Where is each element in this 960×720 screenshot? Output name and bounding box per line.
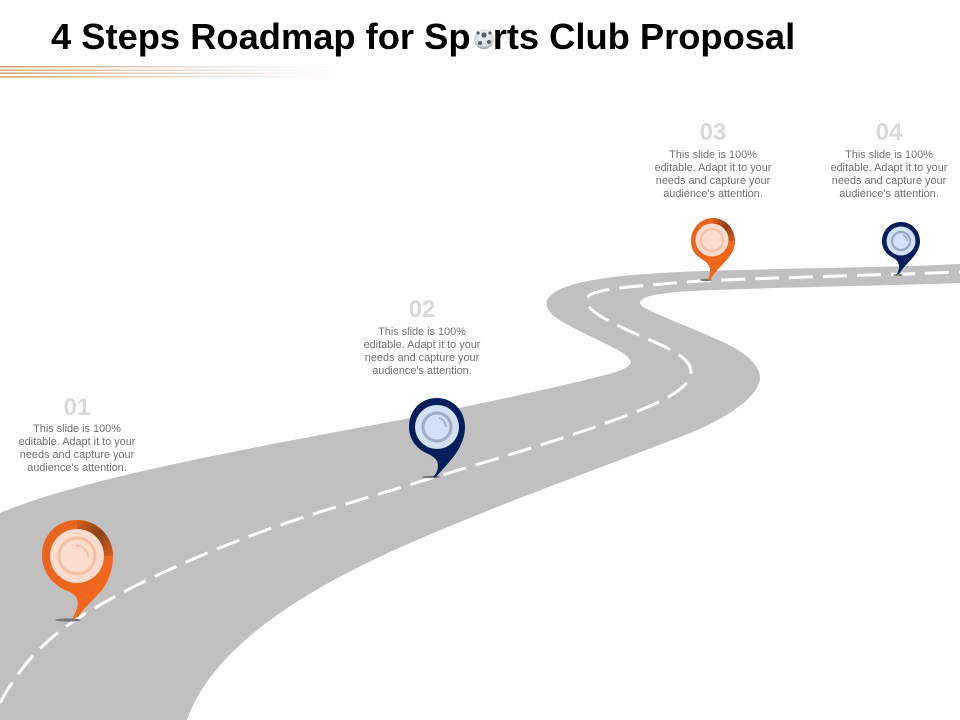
step 03 text: This slide is 100% — [669, 149, 757, 161]
step 03 text — [655, 119, 772, 200]
pin 2 — [409, 398, 465, 478]
pin 3 — [691, 218, 735, 281]
step 03 text: audience's attention. — [663, 188, 763, 200]
step 02 text: 02 — [409, 296, 435, 323]
icon: soccer ball — [474, 29, 494, 49]
step 01 text: This slide is 100% — [33, 423, 121, 435]
step 04 text: audience's attention. — [839, 188, 939, 200]
title: 4 Steps Roadmap for Sports Club Proposal — [51, 16, 795, 57]
step 04 text: This slide is 100% — [845, 149, 933, 161]
step 02 text: audience's attention. — [372, 365, 472, 377]
step 02 text — [364, 296, 480, 377]
step 01 text — [19, 394, 136, 474]
step 03 text: needs and capture your — [656, 175, 770, 187]
step 04 text: editable. Adapt it to your — [831, 162, 947, 174]
step 01 text: needs and capture your — [20, 449, 134, 461]
step 04 text — [831, 119, 948, 200]
step 04 text: 04 — [876, 119, 902, 146]
step 02 text: editable. Adapt it to your — [364, 339, 480, 351]
step 01 text: 01 — [64, 394, 90, 421]
pin 4 — [882, 222, 920, 276]
step 04 text: needs and capture your — [832, 175, 946, 187]
road — [0, 264, 960, 720]
road centre dashes — [0, 272, 960, 703]
step 01 text: audience's attention. — [27, 462, 127, 474]
step 02 text: This slide is 100% — [378, 326, 466, 338]
step 02 text: needs and capture your — [365, 352, 479, 364]
step 03 text: editable. Adapt it to your — [655, 162, 771, 174]
step 01 text: editable. Adapt it to your — [19, 436, 135, 448]
step 03 text: 03 — [700, 119, 726, 146]
pin 1 — [42, 520, 113, 622]
